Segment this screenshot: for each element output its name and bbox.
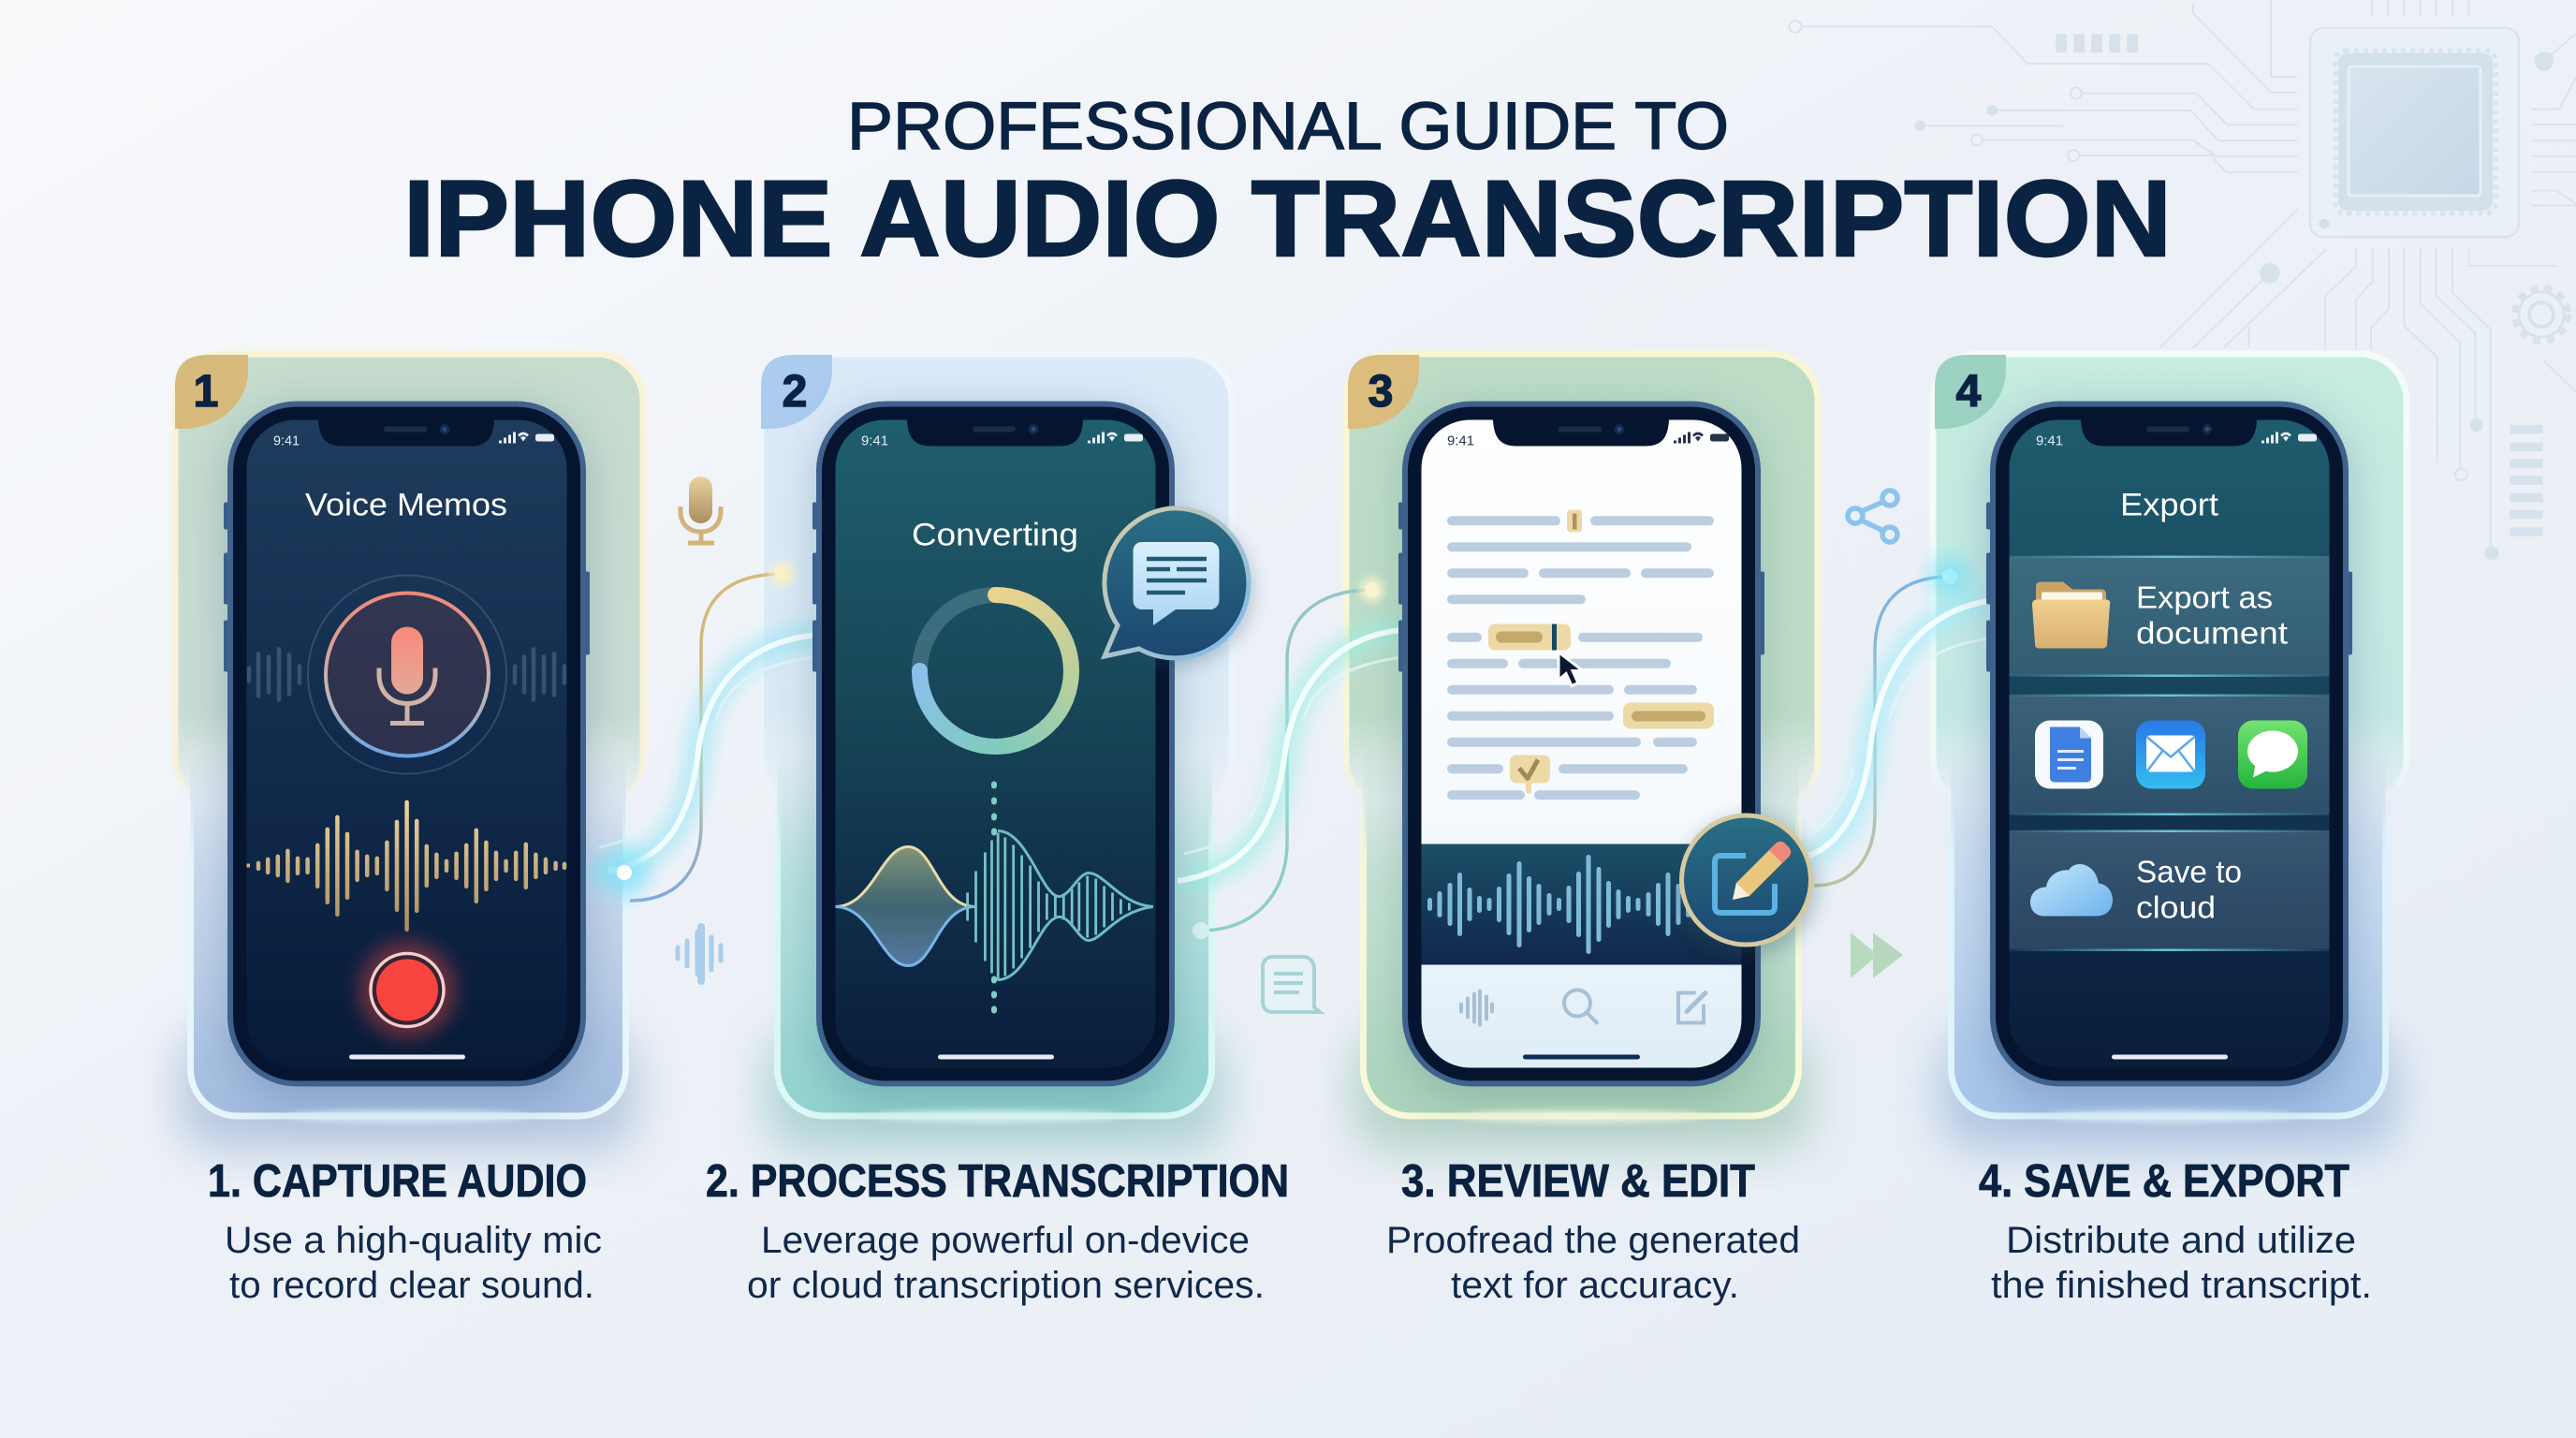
side sound waves xyxy=(249,650,564,700)
tab bar icons xyxy=(1461,990,1705,1024)
icon: floating fast forward arrows xyxy=(1851,932,1903,978)
status bar xyxy=(273,433,554,449)
badge 4 xyxy=(1935,355,2006,429)
icon: floating microphone xyxy=(681,477,721,543)
edit badge xyxy=(1679,815,1818,955)
screen labels: cloud xyxy=(2136,889,2216,925)
icon: mail xyxy=(2136,721,2205,788)
badge 1 xyxy=(175,355,248,429)
caption: step 2: 2. PROCESS TRANSCRIPTION xyxy=(706,1156,1289,1207)
status bar: 9:41 xyxy=(1447,433,1474,449)
caption: step 1: to record clear sound. xyxy=(229,1265,594,1306)
record button xyxy=(359,942,456,1039)
title xyxy=(403,90,2172,279)
speech bubble badge xyxy=(1099,508,1252,665)
screen labels: Export as xyxy=(2136,580,2273,614)
caption: step 1: 1. CAPTURE AUDIO xyxy=(208,1156,587,1207)
icon: floating sound wave xyxy=(678,927,721,981)
phone 4: export xyxy=(1986,401,2352,1103)
caption: step 2 xyxy=(706,1156,1289,1306)
panel: card 3 background xyxy=(1346,354,1818,1152)
panel: card 1 background xyxy=(175,354,643,1152)
transcript lines xyxy=(1452,521,1709,795)
caption: step 2: Leverage powerful on-device xyxy=(761,1220,1250,1261)
connector 1 to 2 xyxy=(585,561,824,901)
caption: step 3: 3. REVIEW & EDIT xyxy=(1401,1156,1755,1207)
icon: cloud xyxy=(2030,864,2113,916)
caption: step 4: Distribute and utilize xyxy=(2006,1220,2356,1261)
badge 2 xyxy=(761,355,832,429)
phone 3: transcript review xyxy=(1398,401,1764,1103)
caption: step 1 xyxy=(208,1156,602,1306)
badge 2: 2 xyxy=(783,367,807,417)
phone 2: converting xyxy=(812,401,1178,1103)
highlights xyxy=(1488,509,1714,790)
circuit board background pattern xyxy=(1789,0,2576,560)
progress ring xyxy=(919,595,1071,747)
status bar xyxy=(1447,433,1729,449)
caption: step 4: 4. SAVE & EXPORT xyxy=(1979,1156,2349,1207)
caption: step 2: or cloud transcription services. xyxy=(747,1265,1265,1306)
connector 2 to 3 xyxy=(1175,577,1404,939)
phone 1: voice memos xyxy=(224,401,590,1103)
badge 3: 3 xyxy=(1368,367,1393,417)
icon: folder xyxy=(2032,582,2110,648)
caption: step 3: text for accuracy. xyxy=(1451,1265,1739,1306)
connector 3 to 4 xyxy=(1802,556,1989,886)
caption: step 4 xyxy=(1979,1156,2372,1306)
screen labels xyxy=(2120,487,2288,925)
microchip xyxy=(2310,28,2519,237)
waveform xyxy=(246,802,564,930)
status bar xyxy=(2036,433,2317,449)
panel: card 2 background xyxy=(761,354,1232,1152)
converted waveform xyxy=(835,785,1153,1011)
export rows xyxy=(2009,556,2329,951)
icon: messages xyxy=(2238,721,2307,788)
status bar: 9:41 xyxy=(861,433,888,449)
icon: docs xyxy=(2035,721,2103,788)
status bar: 9:41 xyxy=(2036,433,2063,449)
screen labels: Export xyxy=(2120,487,2219,522)
badge 3 xyxy=(1348,355,1419,429)
icon: floating document bubble xyxy=(1263,957,1320,1012)
panel: card 4 background xyxy=(1933,354,2407,1152)
badge 1: 1 xyxy=(194,367,218,417)
icon: floating share xyxy=(1848,491,1897,542)
caption: step 4: the finished transcript. xyxy=(1991,1265,2372,1306)
gear icon xyxy=(2515,288,2568,341)
screen title: Voice Memos xyxy=(305,487,507,522)
badge 4: 4 xyxy=(1956,367,1982,417)
status bar xyxy=(861,433,1143,449)
status bar: 9:41 xyxy=(273,433,300,449)
screen labels: document xyxy=(2136,616,2288,650)
screen labels: Save to xyxy=(2136,854,2242,889)
title: IPHONE AUDIO TRANSCRIPTION xyxy=(403,159,2172,279)
title: PROFESSIONAL GUIDE TO xyxy=(847,90,1729,164)
caption: step 3: Proofread the generated xyxy=(1386,1220,1800,1261)
cursor xyxy=(1559,652,1583,685)
screen title: Converting xyxy=(912,517,1078,552)
caption: step 3 xyxy=(1386,1156,1800,1306)
caption: step 1: Use a high-quality mic xyxy=(225,1220,602,1261)
record circle xyxy=(308,575,506,773)
audio band xyxy=(1421,844,1741,964)
